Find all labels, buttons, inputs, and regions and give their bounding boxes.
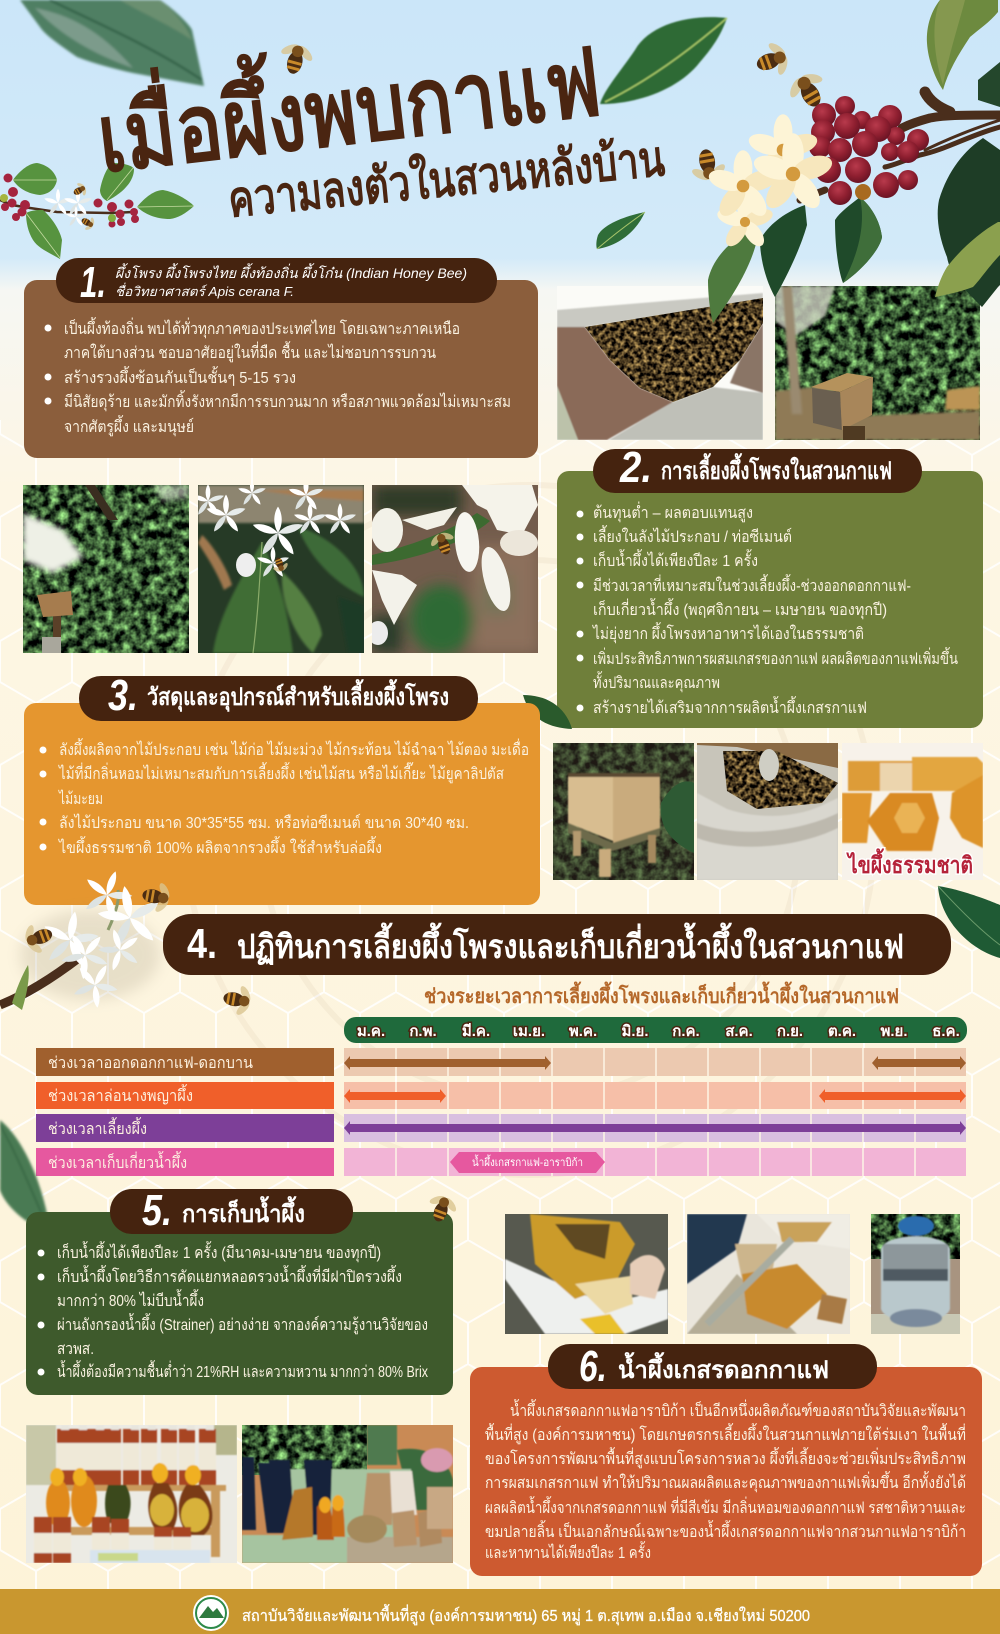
month header: ก.ย. xyxy=(777,1023,803,1040)
bullets 5: เก็บน้ำผึ้งได้เพียงปีละ 1 ครั้ง (มีนาคม-เมษายน ของทุกปี) xyxy=(57,1241,381,1263)
row: queen lure: ช่วงเวลาล่อนางพญาผึ้ง xyxy=(48,1084,193,1105)
photo: natural beeswax blocks xyxy=(842,743,983,880)
bullets 3: ลังผึ้งผลิตจากไม้ประกอบ เช่น ไม้ก่อ ไม้มะม่วง ไม้กระท้อน ไม้ฉำฉา ไม้ตอง มะเดื่อ xyxy=(59,738,529,759)
bullets 2: เลี้ยงในลังไม้ประกอบ / ท่อซีเมนต์ xyxy=(593,525,792,546)
month header: ส.ค. xyxy=(725,1023,753,1040)
heading 1: ชื่อวิทยาศาสตร์ Apis cerana F. xyxy=(115,282,294,299)
coffee branch with leaves, berries and flowers: top right xyxy=(706,0,1000,323)
title: เมื่อผึ้งพบกาแฟ xyxy=(90,13,606,192)
heading 6: น้ำผึ้งเกสรดอกกาแฟ xyxy=(618,1351,829,1384)
bullets 2: สร้างรายได้เสริมจากการผลิตน้ำผึ้งเกสรกาแฟ xyxy=(593,696,867,717)
bullets 3: ไขผึ้งธรรมชาติ 100% ผลิตจากรวงผึ้ง ใช้สำหรับล่อผึ้ง xyxy=(57,836,382,857)
month header: พ.ค. xyxy=(569,1023,597,1040)
bullets 1: จากศัตรูผึ้ง และมนุษย์ xyxy=(64,415,194,437)
bullets 3: ไม้มะยม xyxy=(57,789,103,808)
heading 1 xyxy=(56,258,497,307)
coffee sprig: left of title xyxy=(0,163,194,259)
bee: top right 1 xyxy=(751,37,795,83)
heading 4: calendar: 4. xyxy=(187,920,217,967)
row: flowering xyxy=(36,1048,966,1076)
bullets 5 xyxy=(38,1241,428,1381)
month header: เม.ย. xyxy=(513,1023,545,1040)
heading 2 xyxy=(593,443,922,493)
bullets 2: เก็บเกี่ยวน้ำผึ้ง (พฤศจิกายน – เมษายน ของทุกปี) xyxy=(593,598,887,620)
photo: bottle strainer xyxy=(871,1214,960,1334)
leaf: near title xyxy=(600,17,727,104)
month header: ต.ค. xyxy=(828,1023,856,1040)
heading 5 xyxy=(110,1186,353,1235)
footer address: สถาบันวิจัยและพัฒนาพื้นที่สูง (องค์การมหาชน) 65 หมู่ 1 ต.สุเทพ อ.เมือง จ.เชียงใหม่ 50200 xyxy=(242,1604,810,1626)
photo: honey bottles display xyxy=(26,1425,237,1563)
heading 6 xyxy=(548,1342,877,1391)
harvest period arrow: น้ำผึ้งเกสรกาแฟ-อาราบิก้า xyxy=(472,1154,583,1169)
bullets 3: ลังไม้ประกอบ ขนาด 30*35*55 ซม. หรือท่อซีเมนต์ ขนาด 30*40 ซม. xyxy=(59,813,469,832)
bee: top right 2 xyxy=(782,65,835,116)
bullets 3: ไม้ที่มีกลิ่นหอมไม่เหมาะสมกับการเลี้ยงผึ้ง เช่นไม้สน หรือไม้เกี๊ยะ ไม้ยูคาลิปตัส xyxy=(57,762,504,784)
month header: พ.ย. xyxy=(880,1023,908,1040)
icon: institute logo xyxy=(193,1595,229,1631)
bullets 2: เก็บน้ำผึ้งได้เพียงปีละ 1 ครั้ง xyxy=(593,549,758,570)
panel 2: keeping bees in coffee garden xyxy=(557,443,983,728)
heading 6: 6. xyxy=(579,1342,607,1391)
row: harvest: ช่วงเวลาเก็บเกี่ยวน้ำผึ้ง xyxy=(48,1151,187,1172)
photo: hive in cement ring xyxy=(697,743,838,880)
bee: title left xyxy=(275,38,317,78)
heading 5: การเก็บน้ำผึ้ง xyxy=(182,1195,305,1228)
leaf: top left xyxy=(20,0,204,86)
paragraph 6: และหาทานได้เพียงปีละ 1 ครั้ง xyxy=(485,1541,651,1562)
heading 4: calendar xyxy=(163,914,951,975)
leaf: small below subtitle xyxy=(596,212,645,249)
bee: near flower xyxy=(687,146,729,185)
photo: bee on coffee flower xyxy=(372,485,538,653)
bullets 5: มากกว่า 80% ไม่บีบน้ำผึ้ง xyxy=(57,1289,204,1310)
bullets 2 xyxy=(576,501,958,717)
photo: comb with bees xyxy=(505,1214,668,1334)
leaf: beside panel 2 xyxy=(523,695,572,729)
photo: wooden hive box xyxy=(553,743,694,880)
calendar subtitle: ช่วงระยะเวลาการเลี้ยงผึ้งโพรงและเก็บเกี่ยวน้ำผึ้งในสวนกาแฟ xyxy=(424,981,899,1008)
bullets 2: ไม่ยุ่งยาก ผึ้งโพรงหาอาหารได้เองในธรรมชาติ xyxy=(591,622,864,644)
row: flowering: ช่วงเวลาออกดอกกาแฟ-ดอกบาน xyxy=(48,1055,253,1072)
panel 1: species xyxy=(24,258,538,458)
coffee flowers branch: section 4 xyxy=(0,863,167,1014)
heading 3 xyxy=(79,671,478,721)
leaf: right of section 4 xyxy=(938,886,1000,958)
heading 2: การเลี้ยงผึ้งโพรงในสวนกาแฟ xyxy=(661,452,892,485)
panel 3: materials xyxy=(24,671,540,905)
bee: top right of panel 5 xyxy=(423,1190,461,1226)
heading 4: calendar: ปฏิทินการเลี้ยงผึ้งโพรงและเก็บเกี่ยวน้ำผึ้งในสวนกาแฟ xyxy=(237,922,904,965)
photo: coffee flowers and leaves xyxy=(198,485,364,653)
bullets 5: สวพส. xyxy=(57,1341,94,1358)
heading 3: วัสดุและอุปกรณ์สำหรับเลี้ยงผึ้งโพรง xyxy=(147,678,449,713)
month header: มิ.ย. xyxy=(621,1022,649,1040)
bullets 3 xyxy=(40,738,529,857)
bullets 1: สร้างรวงผึ้งซ้อนกันเป็นชั้นๆ 5-15 รวง xyxy=(64,366,296,387)
paragraph 6 xyxy=(485,1399,966,1562)
bullets 1: เป็นผึ้งท้องถิ่น พบได้ทั่วทุกภาคของประเทศไทย โดยเฉพาะภาคเหนือ xyxy=(64,317,460,339)
heading 5: 5. xyxy=(142,1186,172,1235)
heading 1: 1. xyxy=(80,258,106,307)
bee: left of flowers xyxy=(19,918,57,958)
photo: cutting comb xyxy=(687,1214,850,1334)
photo: hive under concrete xyxy=(557,286,763,440)
footer xyxy=(0,1589,1000,1634)
panel 6: coffee blossom honey xyxy=(470,1342,982,1576)
subtitle: ความลงตัวในสวนหลังบ้าน xyxy=(226,129,667,228)
panel 5: honey harvest xyxy=(26,1186,453,1395)
bullets 2: ต้นทุนต่ำ – ผลตอบแทนสูง xyxy=(593,501,753,523)
month header: มี.ค. xyxy=(462,1023,490,1040)
harvest period arrow xyxy=(450,1152,605,1173)
bullets 1: มีนิสัยดุร้าย และมักทิ้งรังหากมีการรบกวนมาก หรือสภาพแวดล้อมไม่เหมาะสม xyxy=(64,390,511,412)
photo: tree with hive box xyxy=(23,485,189,653)
bullets 1 xyxy=(44,317,511,437)
bullets 2: ทั้งปริมาณและคุณภาพ xyxy=(593,671,720,693)
row: harvest xyxy=(36,1148,966,1176)
month header: ก.ค. xyxy=(672,1023,700,1040)
bullets 5: ผ่านถังกรองน้ำผึ้ง (Strainer) อย่างง่าย จากองค์ความรู้งานวิจัยของ xyxy=(57,1313,428,1335)
bee: on flowers xyxy=(140,878,174,916)
bee: under branch xyxy=(221,981,255,1019)
leaf: left of section 5 xyxy=(0,1120,50,1232)
row: keeping: ช่วงเวลาเลี้ยงผึ้ง xyxy=(48,1117,147,1138)
month header xyxy=(344,1017,967,1043)
calendar chart xyxy=(36,1017,967,1176)
heading 2: 2. xyxy=(619,443,652,492)
bullets 1: ภาคใต้บางส่วน ชอบอาศัยอยู่ในที่มืด ชื้น และไม่ชอบการรบกวน xyxy=(64,341,436,363)
row: queen lure xyxy=(36,1082,966,1109)
bullets 5: เก็บน้ำผึ้งโดยวิธีการคัดแยกหลอดรวงน้ำผึ้งที่มีฝาปิดรวงผึ้ง xyxy=(57,1265,402,1286)
month header: ก.พ. xyxy=(409,1023,437,1040)
month header: ธ.ค. xyxy=(932,1023,960,1040)
month header: ม.ค. xyxy=(357,1023,385,1040)
bullets 5: น้ำผึ้งต้องมีความชื้นต่ำว่า 21%RH และความหวาน มากกว่า 80% Brix xyxy=(57,1360,428,1381)
heading 1: ผึ้งโพรง ผึ้งโพรงไทย ผึ้งท้องถิ่น ผึ้งโก๋น (Indian Honey Bee) xyxy=(115,263,467,281)
row: keeping xyxy=(36,1114,966,1142)
heading 3: 3. xyxy=(108,671,138,720)
photo: box in coffee garden xyxy=(775,286,980,440)
photo: coffee bags and honey xyxy=(242,1425,453,1563)
bullets 2: มีช่วงเวลาที่เหมาะสมในช่วงเลี้ยงผึ้ง-ช่วงออกดอกกาแฟ- xyxy=(593,574,911,595)
